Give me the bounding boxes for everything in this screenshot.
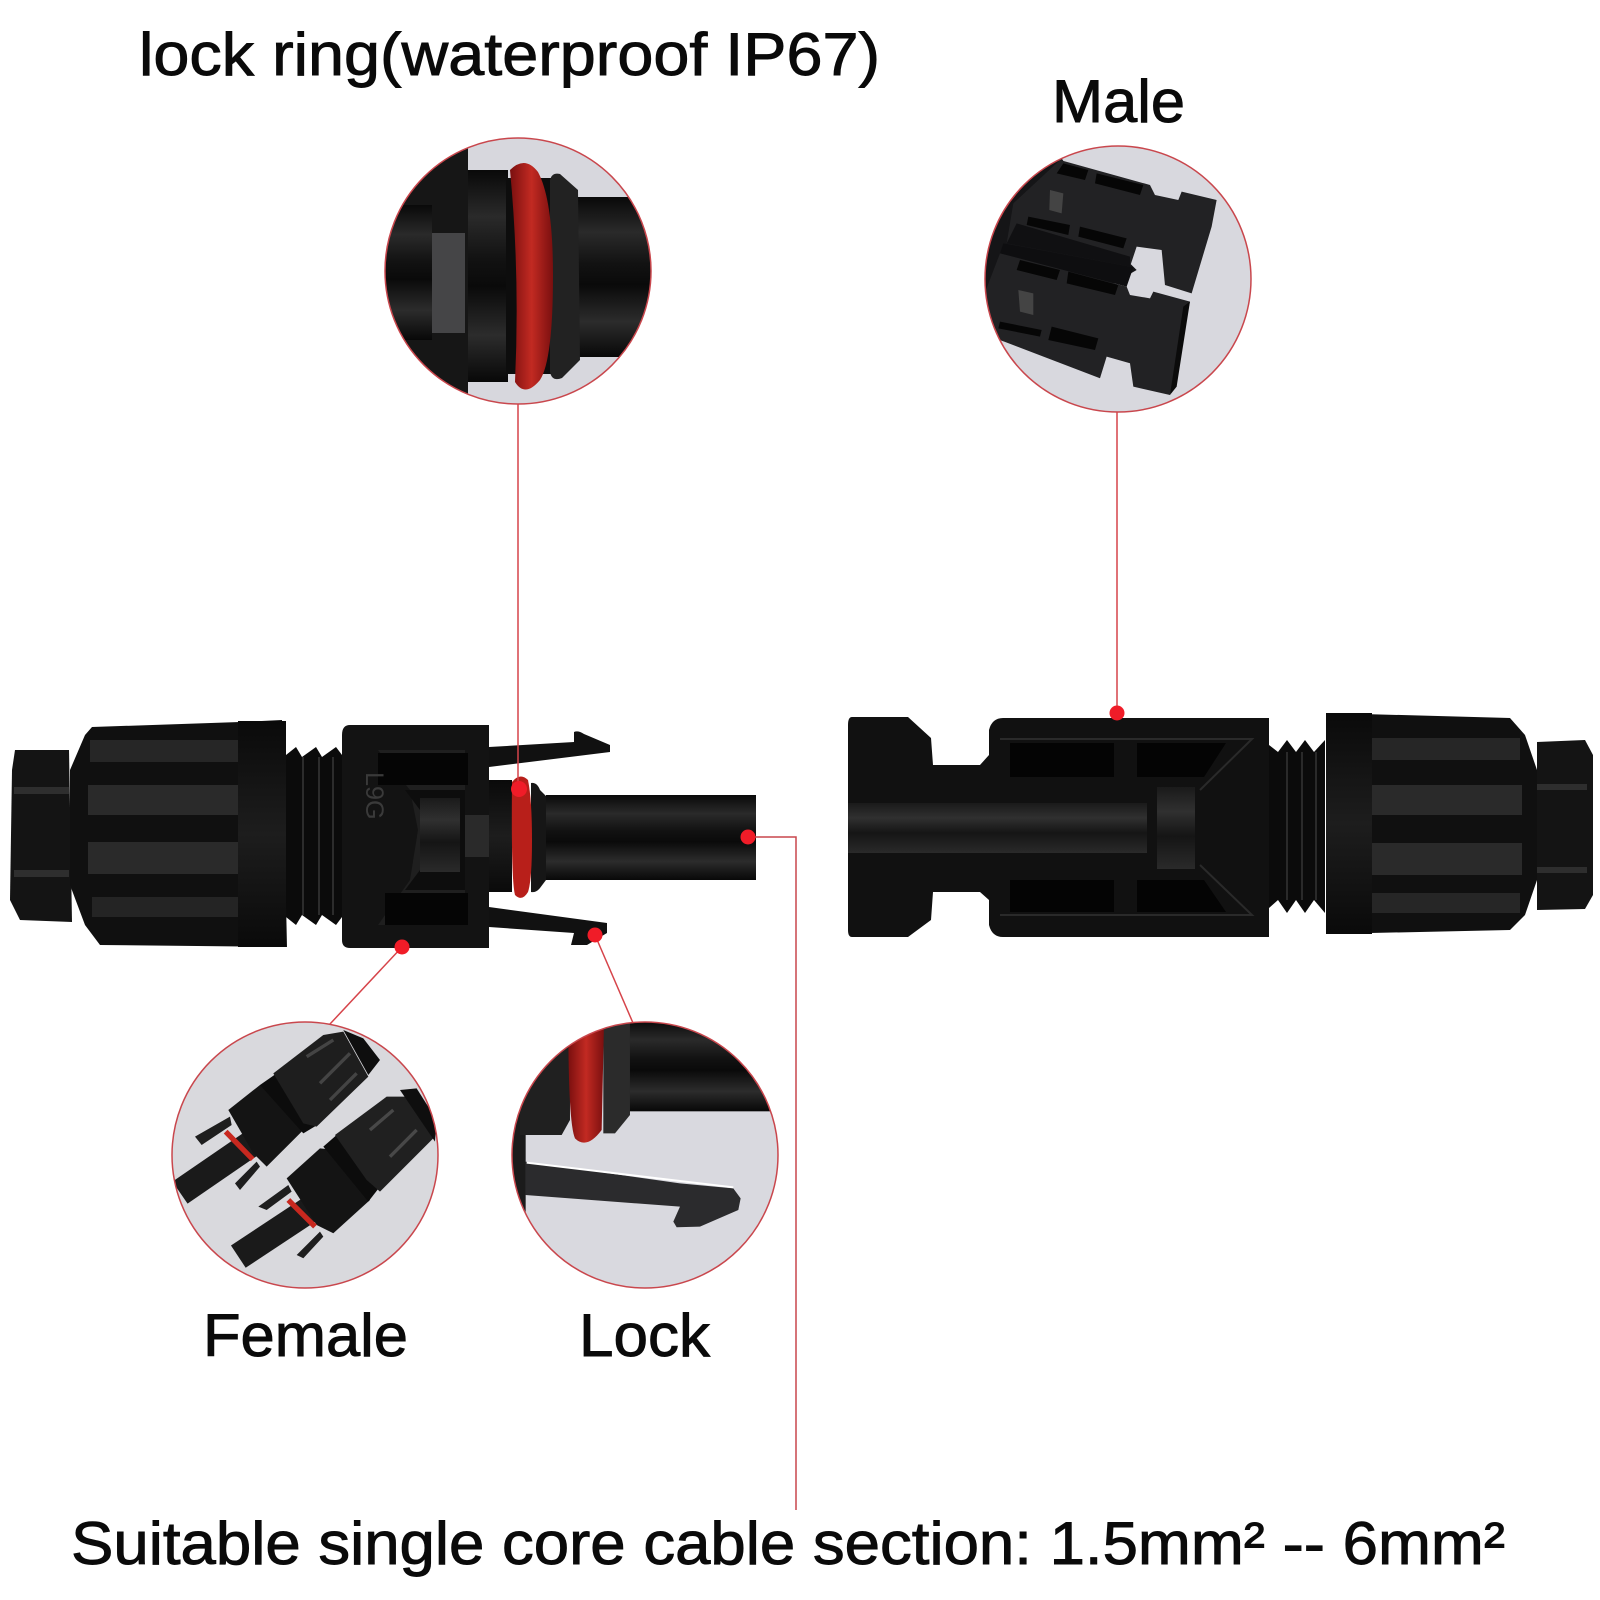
leader line: female [330, 940, 410, 1024]
pin [546, 795, 756, 880]
nut [1326, 713, 1537, 934]
female connector photo (left) [10, 720, 756, 948]
red o-ring [512, 776, 532, 898]
end cap [10, 750, 72, 922]
leader line: lock ring [511, 404, 527, 797]
thread [286, 747, 342, 925]
circle outline: male [985, 146, 1251, 412]
circle: lock clip detail [508, 1020, 778, 1288]
label: Female: Female [203, 1302, 408, 1369]
dark left fill [980, 158, 1137, 343]
nut [70, 720, 287, 947]
circle outline: lock [512, 1022, 778, 1288]
circle: female connectors detail [172, 1022, 438, 1288]
lower female connector [238, 1088, 437, 1258]
male connector photo (right) [848, 713, 1593, 937]
circle: lock ring detail [380, 130, 652, 410]
leader line: male [1110, 412, 1124, 720]
neck [489, 780, 512, 892]
center bar [848, 803, 1147, 853]
bottom caption: Suitable single core cable section: 1.5mm² -- 6mm² [71, 1510, 1505, 1577]
title: lock ring: lock ring(waterproof IP67) [139, 21, 880, 88]
label: Male: Male [1052, 68, 1185, 135]
top clip [489, 731, 610, 767]
main housing [848, 717, 1269, 937]
thread [1269, 740, 1325, 913]
upper female connector [180, 1030, 380, 1193]
circle outline: lock ring [385, 138, 651, 404]
circle: male connectors detail [980, 146, 1251, 412]
top male connector [1000, 160, 1217, 293]
circle outline: female [172, 1022, 438, 1288]
label: Lock: Lock [579, 1302, 711, 1369]
flange [531, 783, 546, 892]
end cap [1537, 740, 1593, 910]
leader line: cable section [740, 830, 796, 1510]
bottom male connector [983, 253, 1190, 395]
windows [1010, 743, 1226, 912]
leader line: lock [588, 928, 633, 1023]
lighter block [1157, 787, 1195, 869]
bottom clip [489, 907, 607, 945]
body [342, 725, 489, 948]
body mark: L9G [360, 772, 388, 820]
